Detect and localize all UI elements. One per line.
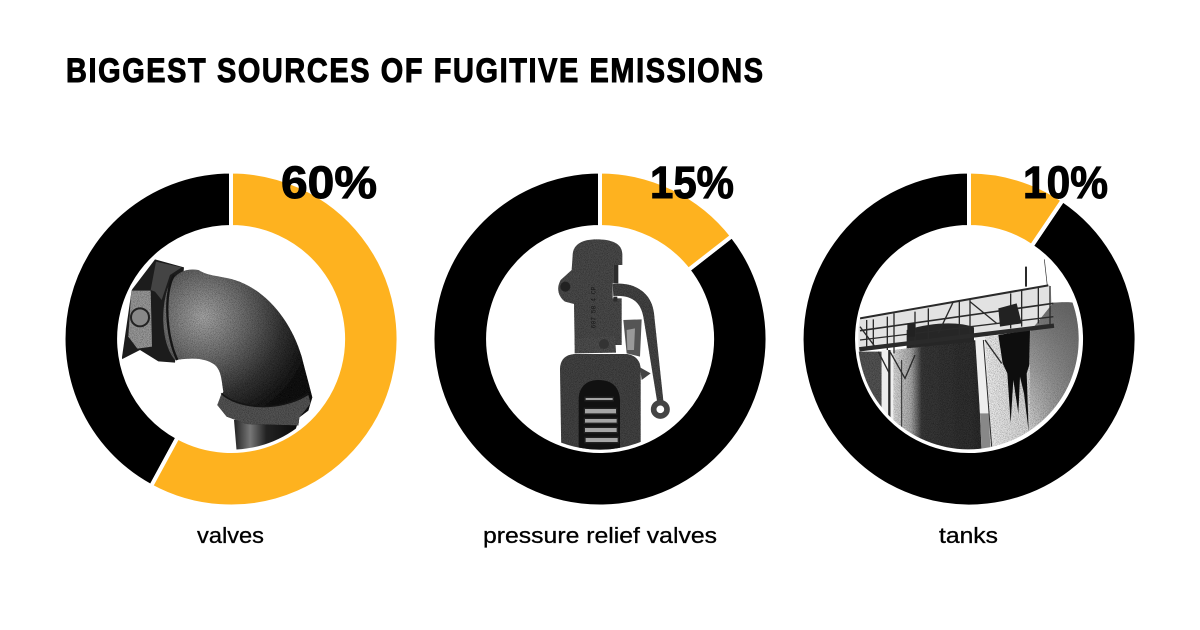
category label: valves [197,523,264,548]
percent label: 10% [1023,157,1108,208]
percent label: 15% [650,157,734,208]
percent label: 60% [281,157,377,208]
donut chart: tanks 10% [802,171,1137,507]
category label: tanks [939,523,998,548]
donut chart: pressure relief valves 15% [432,172,767,506]
icon: pressure relief valve photo [558,239,667,453]
panel: tanks [802,157,1137,548]
icon: storage tanks photo [858,259,1080,453]
category label: pressure relief valves [483,523,717,548]
title: BIGGEST SOURCES OF FUGITIVE EMISSIONS [66,51,763,90]
icon: pipe elbow photo [122,259,312,452]
panel: valves [64,157,399,548]
donut chart: valves 60% [64,172,399,506]
panel: pressure relief valves [432,157,767,548]
icon: pressure relief valve photo: 607 50 4 CP [591,286,598,328]
